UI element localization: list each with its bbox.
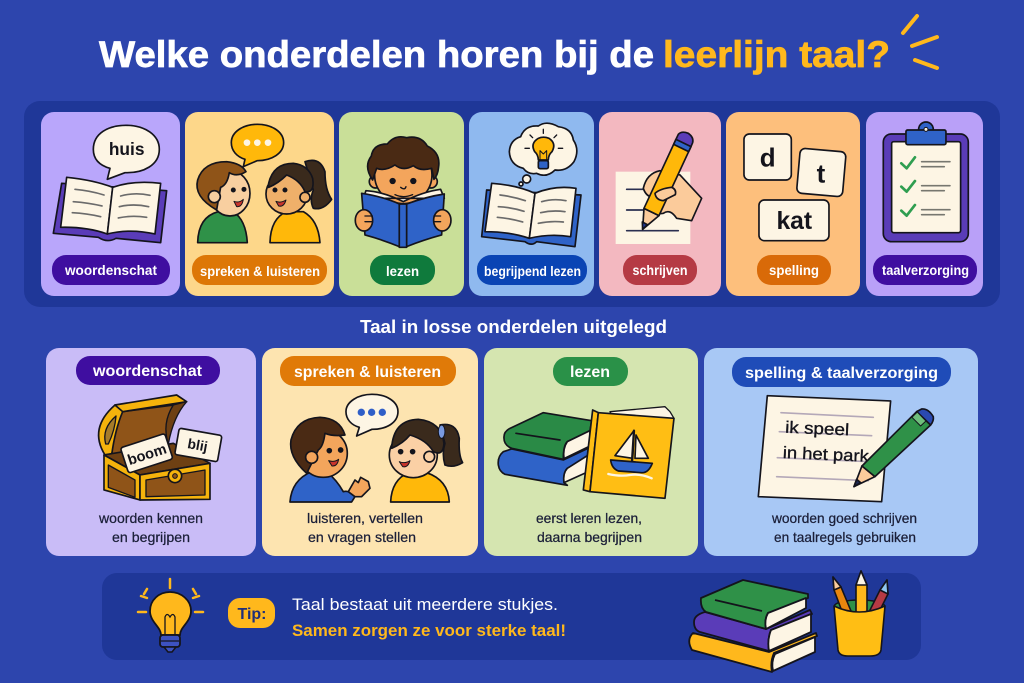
card: taalverzorging — [866, 112, 983, 296]
description: woorden goed schrijven — [771, 510, 917, 526]
description: eerst leren lezen, — [536, 510, 642, 526]
section heading: Taal in losse onderdelen uitgelegd — [360, 317, 667, 337]
icon: treasure chest with word cards: blij — [186, 435, 209, 455]
description: woorden kennen — [98, 510, 203, 526]
card: lezen — [339, 112, 464, 296]
icon: paper with pencil: ik speel — [785, 418, 850, 439]
description — [98, 510, 203, 545]
icon: stack of books — [689, 580, 817, 672]
card: spelling: t — [817, 159, 826, 189]
card: spreken & luisteren — [185, 112, 334, 296]
description — [536, 510, 642, 545]
panel: spelling & taalverzorging explained — [704, 348, 978, 556]
card: lezen: lezen — [386, 263, 419, 279]
panel: spelling & taalverzorging explained: spelling & taalverzorging — [745, 365, 938, 382]
description — [771, 510, 917, 545]
icon: title accent rays — [903, 16, 937, 68]
card: woordenschat: huis — [109, 139, 144, 159]
description: en begrijpen — [112, 529, 190, 545]
card: spreken & luisteren: spreken & luisteren — [200, 263, 320, 279]
description — [307, 510, 423, 545]
card: begrijpend lezen — [469, 112, 594, 296]
description: en taalregels gebruiken — [774, 529, 916, 545]
icon: paper with pencil: in het park — [782, 443, 870, 466]
panel: spreken & luisteren explained: spreken & luisteren — [294, 364, 441, 381]
description: daarna begrijpen — [537, 529, 642, 545]
icon: paper with pencil — [758, 396, 933, 502]
tip text — [292, 595, 566, 640]
card: woordenschat: woordenschat — [64, 262, 157, 278]
tip badge: Tip: — [238, 606, 266, 623]
panel: overview of language parts — [24, 101, 1000, 307]
panel: woordenschat explained — [46, 348, 256, 556]
title: leerlijn taal? — [663, 34, 890, 75]
card: schrijven — [599, 112, 721, 296]
description: luisteren, vertellen — [307, 510, 423, 526]
card: taalverzorging: taalverzorging — [882, 262, 969, 278]
card: begrijpend lezen: begrijpend lezen — [484, 263, 581, 279]
icon: treasure chest with word cards — [99, 395, 222, 500]
icon: cup with pencils — [833, 571, 888, 656]
icon: treasure chest with word cards: boom — [126, 441, 169, 469]
icon: light bulb — [138, 579, 203, 652]
title: Welke onderdelen horen bij de — [99, 34, 654, 75]
card: woordenschat — [41, 112, 180, 296]
card: spelling: d — [760, 143, 776, 173]
card: spelling — [726, 112, 860, 296]
tip badge — [228, 598, 275, 628]
tip text: Samen zorgen ze voor sterke taal! — [292, 621, 566, 640]
card: spelling: kat — [776, 208, 812, 235]
tip text: Taal bestaat uit meerdere stukjes. — [292, 595, 558, 614]
title — [99, 34, 890, 75]
panel: woordenschat explained: woordenschat — [92, 363, 203, 380]
panel: lezen explained — [484, 348, 698, 556]
card: spelling: spelling — [769, 262, 819, 278]
panel: tip — [102, 571, 921, 672]
description: en vragen stellen — [308, 529, 416, 545]
icon: two children talking — [290, 394, 463, 502]
icon: books with sailboat book — [498, 407, 674, 498]
panel: lezen explained: lezen — [570, 364, 610, 381]
panel: spreken & luisteren explained — [262, 348, 478, 556]
card: schrijven: schrijven — [632, 262, 688, 278]
